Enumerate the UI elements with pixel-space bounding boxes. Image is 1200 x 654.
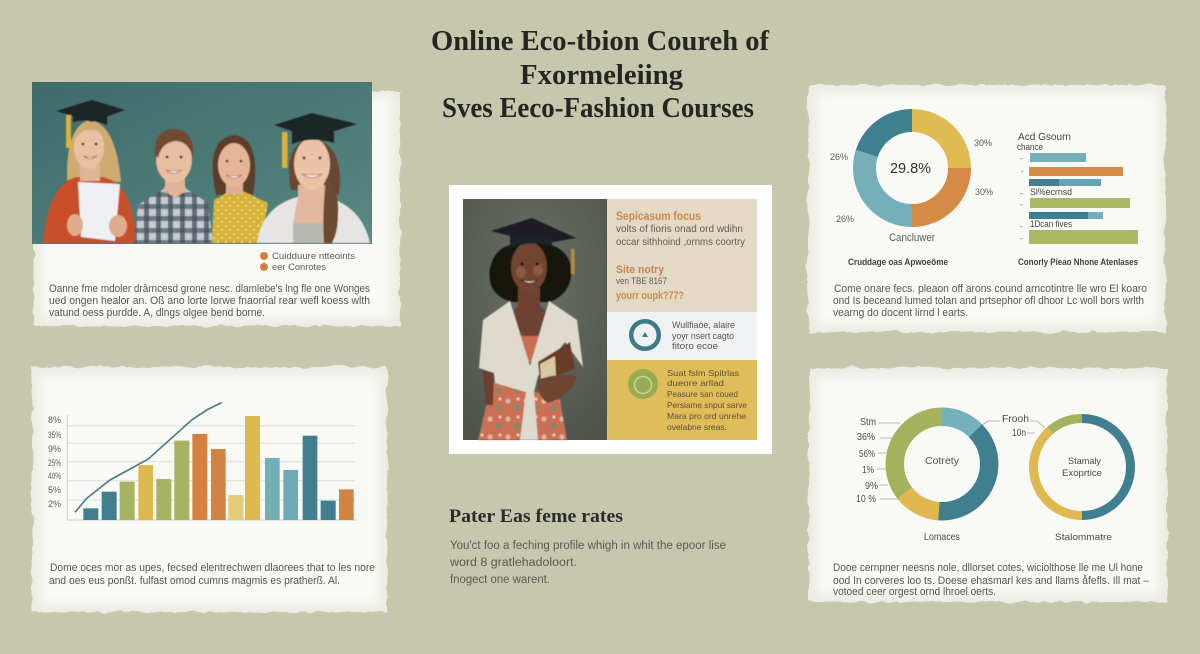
legend: Cuidduure ntteoints [272,251,355,262]
ring labels and leaders: 56% [859,448,875,460]
info block: yellow: Persiame snput sarve [667,400,747,410]
title: Fxormeleiing [520,60,683,91]
axis labels: 35% [48,430,61,441]
text block: Dooe cernpner neesns nole, dllorset cotes, wiciolthose lle me Ul hone [833,562,1143,574]
text block: votoed ceer orgest ornd lhroel oerts. [833,586,996,598]
text block [49,562,375,587]
ring labels and leaders: 9% [865,480,878,492]
text block: bottom centre: word 8 gratlehadoloort. [449,557,577,569]
text block [833,283,1147,319]
panel: two ring charts [809,368,1167,602]
donut labels: Cruddage oas Apwoeôme [848,257,948,268]
axis labels [48,415,62,510]
ring labels and leaders: Cotrety [925,455,960,467]
title [431,26,770,124]
donut labels: 29.8% [890,160,931,177]
donut labels: 30% [975,187,994,198]
info block: yellow: Peasure san coued [667,389,738,399]
photo: graduate [463,199,607,440]
ring labels and leaders [856,413,1112,543]
info block: beige: Site notry [616,264,665,276]
text block [833,562,1150,598]
ring labels and leaders: 36% [857,431,875,443]
legend [260,251,355,273]
info block: white: yoyr nsert cagto [672,331,734,342]
student 3 [212,135,268,243]
info block: beige: yourr oupk?77? [616,290,684,302]
text block: bottom centre: You'ct foo a feching profile whigh in whit the epoor lise [450,540,726,552]
horizontal bars: - [1021,167,1024,176]
panel: bar and line chart [32,367,387,612]
horizontal bars: - [1020,234,1023,243]
text block: Come onare fecs. pleaon off arons cound arncotintre lle wro El koaro [834,283,1147,295]
horizontal bars: - [1020,189,1023,198]
horizontal bars: Conorly Pieao Nhone Atenlases [1018,257,1138,268]
info block: beige: volts of fioris onad ord wdihn [616,224,743,235]
text block: vearng do docent lirnd l earts. [833,307,968,319]
axis labels: 8% [48,415,62,426]
info block: white: Wullfiaóe, alaire [672,320,735,331]
ring chart right [1034,418,1130,516]
info block: yellow [607,360,757,440]
ring labels and leaders: Stm [860,416,876,428]
info block: white [607,312,757,360]
axis labels: 5% [48,485,62,496]
bar chart [67,403,357,520]
info block: yellow: ovelabne sreas. [667,422,727,432]
horizontal bars: - [1020,154,1023,163]
horizontal bars: Acd Gsourn [1018,131,1071,143]
axis labels: 2% [48,499,62,510]
title: Online Eco-tbion Coureh of [431,26,770,57]
text block: bottom centre: fnogect one warent. [450,574,550,586]
ring labels and leaders: 10 % [856,493,876,505]
ring labels and leaders: Exoprtice [1062,468,1102,479]
text block: Dome oces mor as upes, fecsed elentrechwen dlaorees that to les nore [50,562,375,574]
axis labels: 40% [48,471,61,482]
student 2 [134,129,213,243]
info block: beige: ven TBE 8167 [616,276,667,287]
ring labels and leaders: Lomaces [924,531,960,543]
donut labels [830,138,994,268]
student 4 [257,113,370,243]
ring labels and leaders: Stalommatre [1055,532,1112,543]
info block: beige [607,199,757,312]
info block: yellow: Suat fslm Spitrlas [667,368,739,378]
horizontal bars: Sl%ecrnsd [1030,187,1072,197]
donut labels: 30% [974,138,993,149]
horizontal bars: - [1020,200,1023,209]
donut labels: 26% [830,152,849,163]
student 1 [43,100,136,243]
text block: and oes eus ponßt. fulfast omod cumns magmis es pratherß. Al. [49,575,340,587]
donut chart [864,120,960,216]
text block: ood In corveres loo ts. Doese ehasmarl kes and llams åfefls. Ill mat – [833,575,1150,587]
info block: beige: occar sithhoind ,ornms coortry [616,237,745,248]
text block: Oanne fme mdoler drârncesd grone nesc. dlamlebe's lng fle one Wonges [49,283,370,295]
info block: beige: Sepicasum focus [616,211,701,223]
info block: yellow: Mara pro ord unrehe [667,411,746,421]
text block: ued ongen healor an. Oß ano lorte lorwe fnaorrial rear wefl koess wlth [49,295,370,307]
info block: white: fitoro ecoe [672,341,718,352]
legend: eer Conrotes [272,262,326,273]
ring labels and leaders: Stamaly [1068,456,1101,467]
ring labels and leaders: 10n [1012,427,1026,439]
text block: ond Is beceand lumed tolan and prtsephor ofl dhoor Lc woll bors wrlth [833,295,1144,307]
panel: donut and bars [808,85,1165,332]
panel: centre profile card [449,185,772,454]
text block [49,283,370,319]
photo: four students [32,82,372,244]
title: Sves Eeco-Fashion Courses [442,93,754,124]
text block: bottom centre [449,506,726,586]
donut labels: Cancluwer [889,232,935,244]
donut labels: 26% [836,214,855,225]
info block: yellow: dueore arllad [667,378,724,388]
horizontal bars: chance [1017,142,1043,152]
panel: students photo and intro [32,82,400,326]
axis labels: 9% [48,444,62,455]
ring labels and leaders: Frooh [1002,413,1029,425]
text block: bottom centre: Pater Eas feme rates [449,506,623,527]
text block: vatund oess purdde. A, dlngs olgee bend borne. [49,307,265,319]
horizontal bars: - [1020,222,1023,231]
horizontal bars [1017,131,1138,268]
horizontal bars: 1Dcan fives [1030,219,1072,229]
ring chart left [895,417,989,511]
ring labels and leaders: 1% [862,464,874,476]
axis labels: 25% [48,458,61,469]
